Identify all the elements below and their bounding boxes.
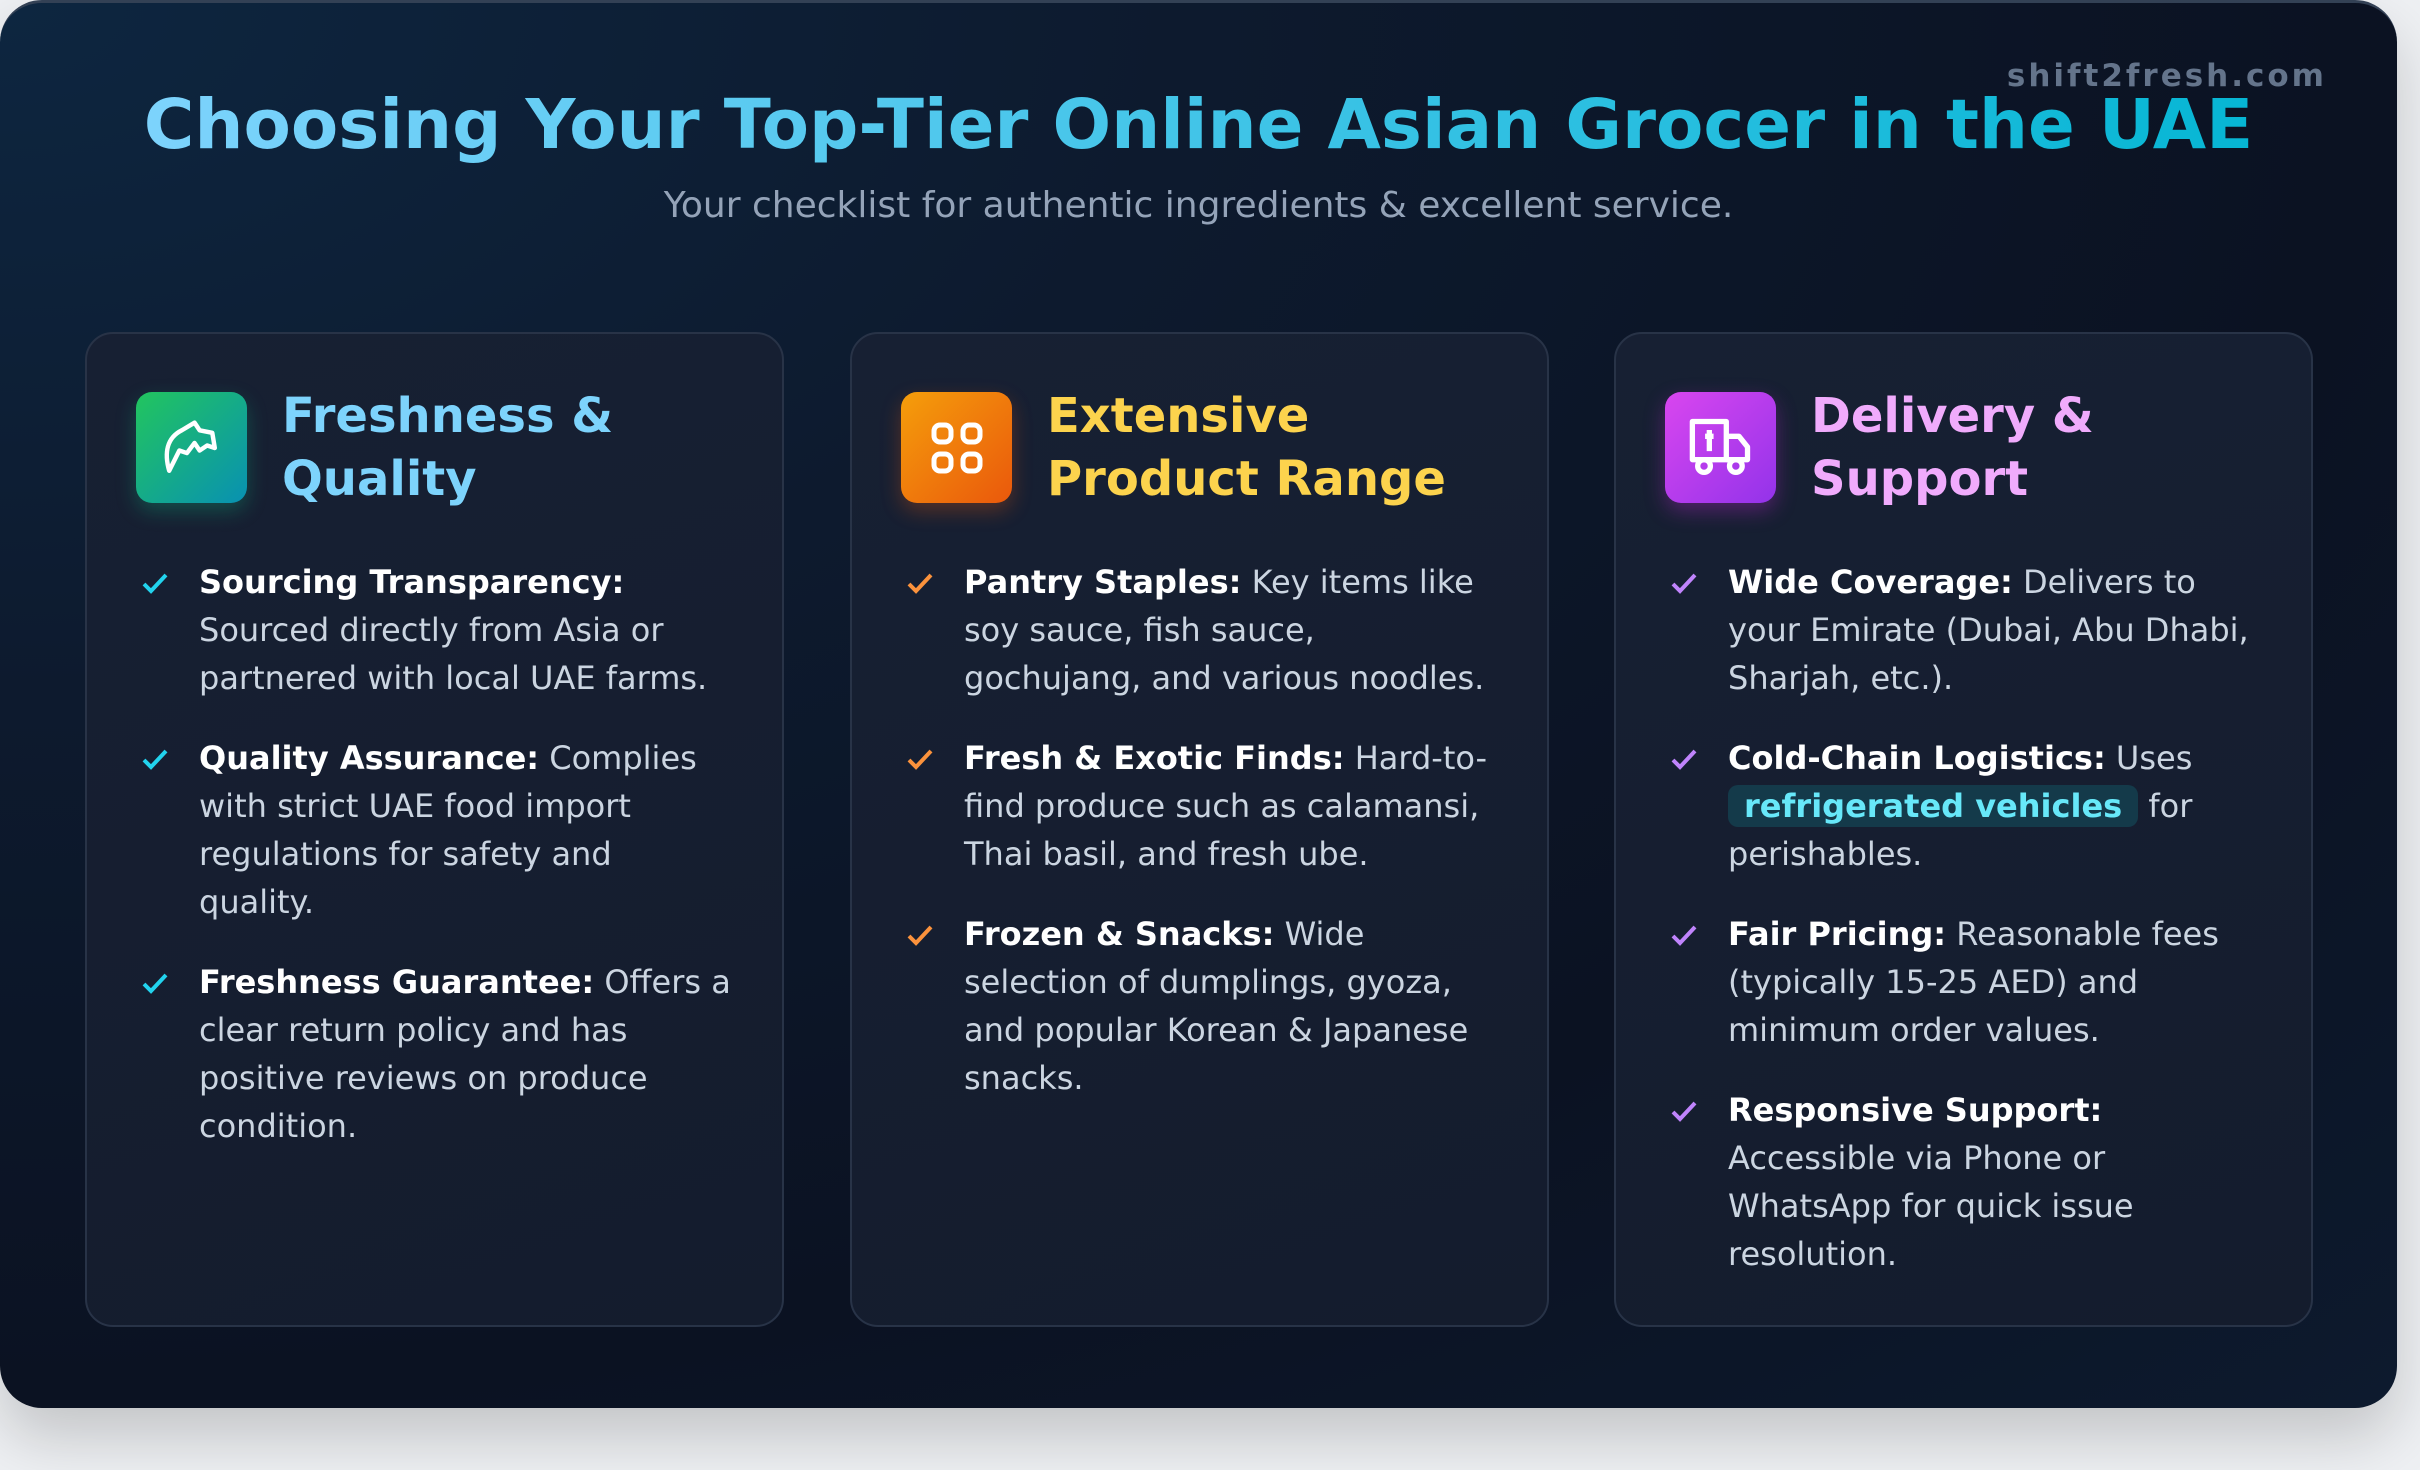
heading: Quality	[282, 451, 477, 507]
item: Responsive Support: Accessible via Phone or WhatsApp for quick issue resolution.	[1728, 1091, 2134, 1273]
icon: truck	[1665, 392, 1776, 503]
subtitle: Your checklist for authentic ingredients & excellent service.	[664, 185, 1733, 226]
item: Pantry Staples: Key items like soy sauce, fish sauce, gochujang, and various noodles.	[964, 563, 1484, 697]
heading	[1047, 388, 1446, 507]
title: Choosing Your Top-Tier Online Asian Grocer in the UAE	[144, 85, 2253, 165]
panel: product range	[850, 332, 1549, 1327]
item: Sourcing Transparency: Sourced directly from Asia or partnered with local UAE farms.	[199, 563, 707, 697]
checklist	[908, 563, 1487, 1097]
item: Quality Assurance: Complies with strict UAE food import regulations for safety and quality.	[199, 739, 697, 921]
item: Frozen & Snacks: Wide selection of dumplings, gyoza, and popular Korean & Japanese snacks.	[964, 915, 1468, 1097]
item: Wide Coverage: Delivers to your Emirate (Dubai, Abu Dhabi, Sharjah, etc.).	[1728, 563, 2249, 697]
heading: Product Range	[1047, 451, 1446, 507]
icon: grid	[901, 392, 1012, 503]
heading: Freshness &	[282, 388, 613, 444]
item: Fair Pricing: Reasonable fees (typically 15-25 AED) and minimum order values.	[1728, 915, 2219, 1049]
item: Cold-Chain Logistics: Uses refrigerated vehicles for perishables.	[1728, 739, 2192, 873]
item: Fresh & Exotic Finds: Hard-to-find produce such as calamansi, Thai basil, and fresh ube.	[964, 739, 1487, 873]
heading: Extensive	[1047, 388, 1309, 444]
watermark: shift2fresh.com	[2007, 58, 2327, 94]
panel: delivery & support	[1614, 332, 2313, 1327]
checklist	[142, 563, 731, 1145]
panel: freshness & quality	[85, 332, 784, 1327]
heading	[282, 388, 613, 507]
icon: leaf	[136, 392, 247, 503]
item: Freshness Guarantee: Offers a clear return policy and has positive reviews on produce condition.	[199, 963, 731, 1145]
heading	[1811, 388, 2094, 507]
heading: Delivery &	[1811, 388, 2094, 444]
checklist	[1672, 563, 2249, 1273]
heading: Support	[1811, 451, 2028, 507]
